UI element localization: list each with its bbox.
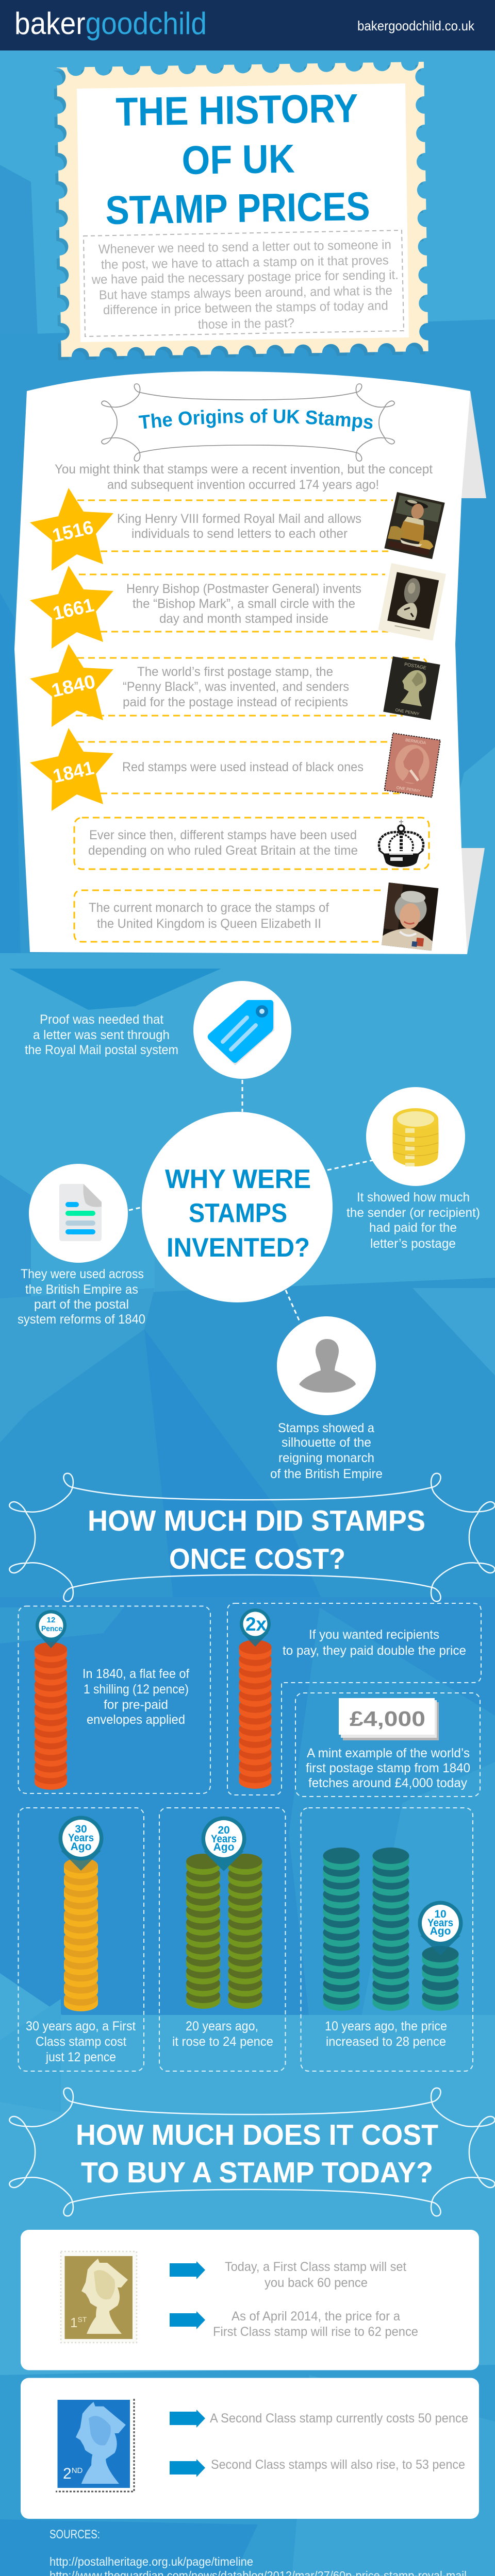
coin stack: 12 pence, 30 years ago — [64, 1858, 98, 2011]
text: second class today: A Second Class stamp currently costs 50 pence — [210, 2411, 468, 2426]
icon: price tag — [193, 981, 291, 1079]
text: first class today: you back 60 pence — [265, 2276, 368, 2290]
text: proof: the Royal Mail postal system — [25, 1043, 178, 1057]
text: silhouette: reigning monarch — [278, 1451, 374, 1465]
intro text box: those in the past? — [198, 316, 294, 332]
text: proof: Proof was needed that — [40, 1012, 163, 1027]
pin: 12 pence: 12 — [47, 1616, 55, 1624]
section: why were stamps invented — [18, 981, 480, 1481]
timeline row: 1841: Red stamps were used instead of black ones — [122, 760, 364, 774]
arrow — [170, 2311, 205, 2329]
stamp: first class — [61, 2251, 137, 2343]
timeline row: 1840: paid for the postage instead of recipients — [123, 695, 348, 709]
timeline row: Queen Elizabeth II — [74, 883, 438, 951]
text: 20 years ago: it rose to 24 pence — [172, 2035, 273, 2049]
intro text box: the post, we have to attach a stamp on it that proves — [101, 253, 389, 272]
text: 20 years ago: 20 years ago, — [186, 2019, 258, 2033]
text: silhouette: silhouette of the — [282, 1435, 371, 1450]
text: 10 years ago: increased to 28 pence — [326, 2035, 446, 2049]
intro text: origins: You might think that stamps were a recent invention, but the concept — [55, 462, 433, 477]
text: flat fee — [82, 1667, 189, 1727]
header bar — [0, 0, 495, 50]
portrait: Queen Elizabeth II — [382, 883, 438, 951]
heading: how much does it cost today — [9, 2088, 495, 2216]
text: first class today — [225, 2260, 406, 2290]
timeline row: changing monarchs: depending on who ruled Great Britain at the time — [88, 843, 358, 858]
coin stacks: 28 pence, 10 years ago — [323, 1848, 459, 2011]
heading: the origins of UK stamps: The Origins of UK Stamps — [138, 409, 373, 432]
timeline row: 1516: individuals to send letters to each other — [131, 527, 348, 541]
text: first class April 2014 — [213, 2309, 418, 2339]
text: British Empire reforms: They were used across — [21, 1267, 144, 1281]
arrow — [170, 2459, 205, 2477]
text: flat fee: In 1840, a flat fee of — [82, 1667, 189, 1681]
panel: flat fee 12 pence — [19, 1606, 210, 1793]
heading: how much did stamps once cost: ONCE COST? — [169, 1543, 345, 1575]
intro text box: But have stamps always been around, and what is the — [99, 283, 392, 302]
panel: 30 years ago — [19, 1808, 144, 2071]
pin: 20 years ago: Years — [211, 1833, 237, 1845]
stamp: second class: 2 — [63, 2465, 72, 2482]
title: OF UK — [182, 136, 295, 183]
text: double price: to pay, they paid double the price — [283, 1643, 466, 1658]
central circle heading: WHY WERE — [165, 1164, 311, 1194]
text: first class April 2014: As of April 2014, the price for a — [232, 2309, 400, 2324]
heading: how much does it cost today: TO BUY A STAMP TODAY? — [81, 2156, 433, 2189]
timeline row: changing monarchs — [74, 818, 429, 869]
text: mint example — [306, 1746, 470, 1790]
pin: 10 years ago — [418, 1901, 463, 1955]
intro text box: we have paid the necessary postage price for sending it. — [91, 268, 399, 287]
timeline row: 1661 — [30, 563, 446, 649]
text: mint example: fetches around £4,000 today — [308, 1776, 467, 1790]
text: 10 years ago: 10 years ago, the price — [325, 2019, 447, 2033]
arrow — [170, 2410, 205, 2428]
coin stack: double price — [239, 1640, 271, 1789]
stamp: red penny: ONE PENNY — [396, 785, 421, 793]
central circle heading: INVENTED? — [167, 1233, 310, 1263]
portrait: Henry VIII — [384, 492, 445, 559]
text: silhouette: of the British Empire — [270, 1467, 383, 1481]
text: flat fee: for pre-paid — [104, 1698, 168, 1712]
panel: double the price — [227, 1603, 481, 1795]
timeline row: 1841 — [30, 728, 440, 811]
title — [105, 86, 370, 233]
icon: monarch silhouette — [277, 1316, 376, 1415]
price card: £4,000 — [350, 1707, 425, 1731]
pin: 12 pence: Pence — [41, 1624, 62, 1633]
price card — [339, 1698, 439, 1740]
icon: crown — [379, 820, 423, 867]
text: how much paid: letter’s postage — [370, 1236, 456, 1251]
text: mint example: A mint example of the world’s — [307, 1746, 470, 1760]
text: proof — [25, 1012, 178, 1057]
panel: origins of UK stamps — [14, 371, 486, 954]
pin: 2x: 2x — [245, 1614, 267, 1635]
intro text box — [84, 230, 404, 336]
ornament frame: origins heading — [102, 384, 394, 461]
text: proof: a letter was sent through — [33, 1028, 170, 1042]
text: flat fee: 1 shilling (12 pence) — [84, 1682, 189, 1697]
text: silhouette: Stamps showed a — [278, 1421, 374, 1435]
timeline row: changing monarchs: Ever since then, different stamps have been used — [89, 828, 357, 842]
stamp: Penny Black: ONE PENNY — [395, 707, 420, 716]
pin: 2x — [240, 1608, 271, 1647]
timeline row: 1840: “Penny Black”, was invented, and senders — [123, 680, 349, 694]
pin: 30 years ago: Years — [68, 1832, 94, 1844]
pin: 30 years ago: 30 — [75, 1823, 87, 1835]
text: how much paid: the sender (or recipient) — [346, 1206, 480, 1220]
text: first class April 2014: First Class stamp will rise to 62 pence — [213, 2325, 418, 2339]
heading: how much did stamps once cost: HOW MUCH DID STAMPS — [88, 1504, 425, 1537]
pin: 10 years ago: Ago — [430, 1925, 451, 1937]
central circle heading — [142, 1112, 333, 1302]
sources — [50, 2528, 467, 2576]
stamp: Penny Black — [383, 656, 440, 720]
pin: 10 years ago: Years — [427, 1917, 453, 1929]
text: 10 years ago — [325, 2019, 447, 2049]
timeline row: Queen Elizabeth II: the United Kingdom is Queen Elizabeth II — [97, 917, 321, 931]
stamp: second class — [56, 2399, 134, 2492]
text: British Empire reforms — [18, 1267, 145, 1327]
timeline row: Queen Elizabeth II: The current monarch to grace the stamps of — [89, 901, 329, 915]
sources: http://postalheritage.org.uk/page/timeline — [50, 2555, 253, 2568]
timeline row: 1661: 1661 — [51, 594, 96, 624]
timeline row: 1516 — [30, 488, 445, 571]
pin: 12 pence — [36, 1610, 67, 1648]
timeline row: 1661: Henry Bishop (Postmaster General) invents — [126, 582, 361, 596]
timeline row: 1840: 1840 — [50, 671, 97, 701]
portrait: Henry Bishop — [378, 563, 446, 640]
panel: 10 years ago — [301, 1808, 473, 2071]
timeline row: 1661: the “Bishop Mark”, a small circle with the — [133, 597, 355, 611]
intro text: origins: and subsequent invention occurred 174 years ago! — [107, 478, 379, 492]
timeline row: 1840 — [30, 644, 440, 727]
timeline row: 1840: The world’s first postage stamp, the — [137, 665, 333, 679]
panel: second class — [21, 2378, 479, 2519]
heading: how much did stamps once cost — [9, 1473, 495, 1601]
text: 30 years ago: just 12 pence — [45, 2050, 116, 2064]
text: how much paid: had paid for the — [369, 1221, 457, 1235]
stamp: Penny Black: POSTAGE — [404, 662, 426, 670]
timeline row: 1516: King Henry VIII formed Royal Mail and allows — [117, 512, 361, 526]
heading: how much does it cost today: HOW MUCH DOES IT COST — [76, 2119, 438, 2151]
intro text box: difference in price between the stamps of today and — [103, 298, 388, 317]
arrow — [170, 2261, 205, 2279]
stamp: first class: 1 — [70, 2315, 77, 2330]
timeline row: 1516: 1516 — [51, 516, 95, 546]
text: first class today: Today, a First Class stamp will set — [225, 2260, 406, 2274]
pin: 20 years ago — [201, 1817, 246, 1871]
title: THE HISTORY — [116, 86, 358, 134]
title: STAMP PRICES — [105, 183, 370, 233]
pin: 10 years ago: 10 — [434, 1908, 447, 1920]
text: 20 years ago — [172, 2019, 273, 2049]
panel: £4,000 mint example — [295, 1693, 480, 1797]
text: double price: If you wanted recipients — [309, 1628, 439, 1642]
text: silhouette — [270, 1421, 383, 1481]
intro text: origins — [55, 462, 433, 492]
text: British Empire reforms: part of the postal — [34, 1297, 129, 1312]
central circle heading: STAMPS — [189, 1198, 287, 1228]
panel: title postage stamp — [54, 62, 428, 360]
text: 30 years ago: 30 years ago, a First — [26, 2019, 136, 2033]
stamp: first class: ST — [77, 2315, 87, 2324]
timeline row: 1661: day and month stamped inside — [159, 612, 328, 626]
stamp: red penny — [384, 733, 440, 798]
text: flat fee: envelopes applied — [87, 1713, 185, 1727]
text: British Empire reforms: the British Empire as — [25, 1282, 138, 1297]
stamp: second class: ND — [72, 2466, 83, 2475]
text: 30 years ago: Class stamp cost — [36, 2035, 126, 2049]
stamp: red penny: BERMUDA — [405, 738, 426, 745]
text: how much paid: It showed how much — [357, 1190, 470, 1205]
timeline row: 1841: 1841 — [51, 757, 96, 787]
panel: first class — [21, 2230, 479, 2370]
text: second class rise: Second Class stamps will also rise, to 53 pence — [211, 2458, 465, 2472]
text: how much paid — [346, 1190, 480, 1251]
icon: document — [29, 1164, 128, 1263]
header url: bakergoodchild.co.uk — [357, 18, 475, 33]
intro text box: Whenever we need to send a letter out to someone in — [98, 238, 391, 257]
pin: 20 years ago: Ago — [213, 1841, 234, 1853]
icon: gold coins — [366, 1087, 465, 1186]
coin stack: 12 pence — [35, 1642, 67, 1790]
pin: 30 years ago — [59, 1816, 103, 1871]
pin: 30 years ago: Ago — [71, 1841, 91, 1853]
text: double price — [283, 1628, 466, 1658]
sources: SOURCES: — [50, 2528, 100, 2541]
coin stacks: 24 pence, 20 years ago — [186, 1854, 262, 2009]
text: mint example: first postage stamp from 1840 — [306, 1761, 470, 1775]
panel: 20 years ago — [159, 1808, 286, 2071]
text: British Empire reforms: system reforms of 1840 — [18, 1312, 145, 1327]
text: 30 years ago — [26, 2019, 136, 2064]
header logo: bakergoodchild — [14, 6, 207, 41]
pin: 20 years ago: 20 — [218, 1824, 230, 1836]
